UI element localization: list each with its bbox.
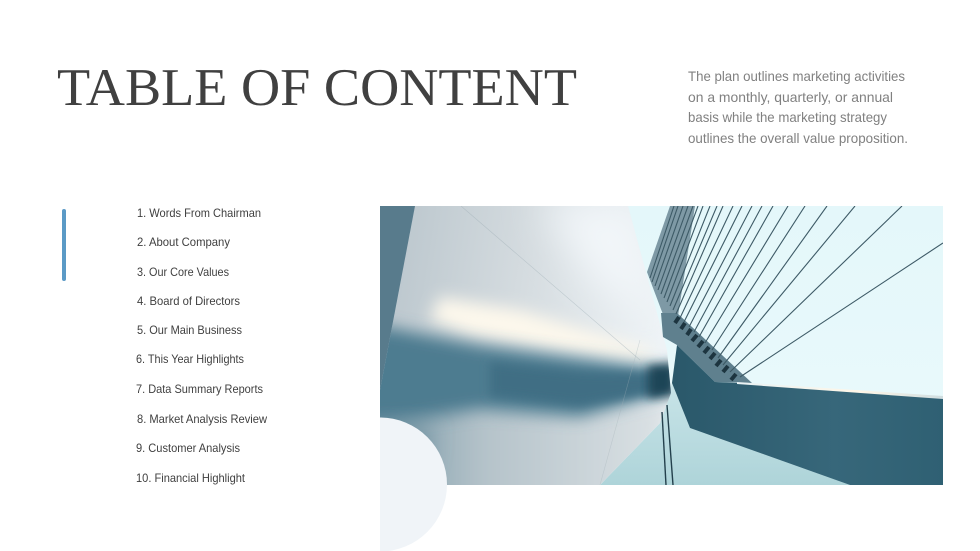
stay cables	[650, 206, 943, 377]
table of contents list	[136, 206, 267, 485]
lower sky under the beam	[600, 383, 850, 485]
table of contents list: 7. Data Summary Reports	[136, 382, 263, 396]
steel sail	[380, 206, 671, 485]
lower support cables	[662, 405, 673, 485]
intro paragraph: outlines the overall value proposition.	[688, 130, 908, 146]
table of contents list: 9. Customer Analysis	[136, 441, 240, 455]
table of contents list: 5. Our Main Business	[137, 323, 242, 337]
table of contents list: 4. Board of Directors	[137, 294, 240, 308]
tower strip	[647, 206, 695, 314]
intro paragraph	[688, 68, 908, 146]
table of contents list: 3. Our Core Values	[137, 265, 229, 279]
anchor deck wedge	[661, 313, 752, 383]
bridge photo	[380, 206, 943, 485]
intro paragraph: basis while the marketing strategy	[688, 109, 887, 125]
table of contents list: 1. Words From Chairman	[137, 206, 261, 220]
accent bar	[62, 209, 66, 281]
title: TABLE OF CONTENT	[57, 59, 577, 117]
sunlit beam edge	[737, 382, 943, 399]
table of contents list: 10. Financial Highlight	[136, 471, 246, 485]
left dark panel	[380, 206, 416, 392]
cable anchors	[675, 317, 736, 380]
intro paragraph: on a monthly, quarterly, or annual	[688, 89, 893, 105]
sky	[628, 206, 943, 396]
bridge beam	[672, 345, 943, 485]
table of contents list: 8. Market Analysis Review	[137, 412, 267, 426]
decorative circle	[380, 418, 447, 551]
table of contents list: 2. About Company	[137, 235, 230, 249]
table of contents list: 6. This Year Highlights	[136, 352, 244, 366]
intro paragraph: The plan outlines marketing activities	[688, 68, 905, 84]
